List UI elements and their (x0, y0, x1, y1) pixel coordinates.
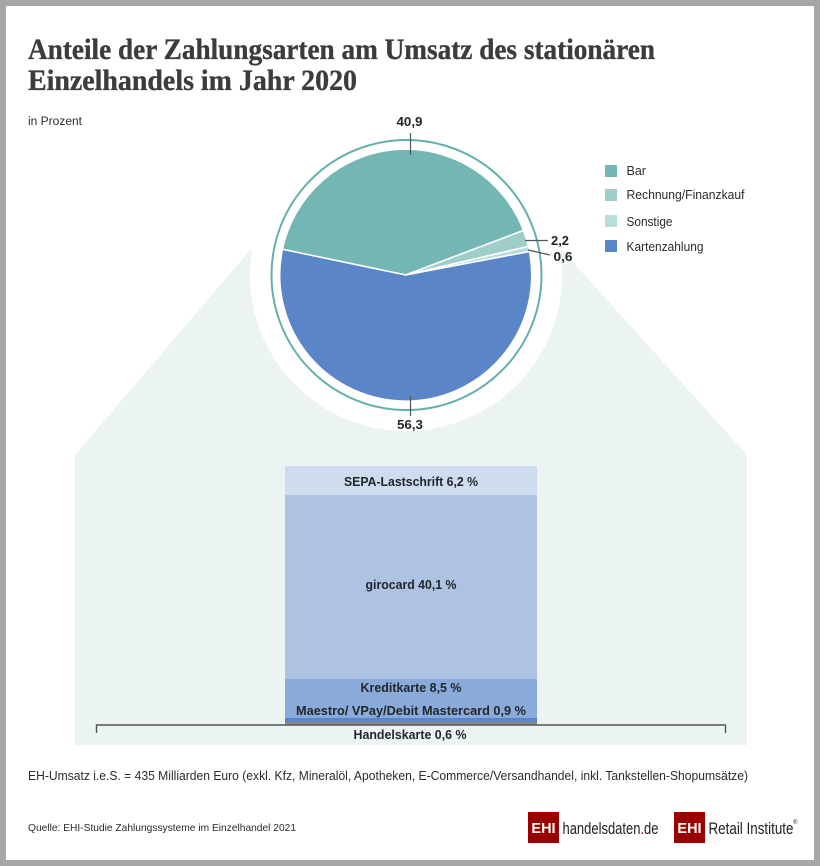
slice: Bar 40,9 (282, 149, 524, 275)
value label: 0,6 (528, 250, 573, 264)
segment: SEPA-Lastschrift (285, 466, 537, 495)
logo: EHI Retail Institute: Retail Institute (708, 819, 794, 838)
segment: Maestro/ VPay/Debit Mastercard: Maestro/ VPay/Debit Mastercard 0,9 % (296, 704, 526, 718)
legend item: Bar: Bar (626, 164, 646, 178)
logo: EHI Retail Institute: ® (793, 819, 798, 826)
legend item: Sonstige (605, 215, 673, 229)
white halo (250, 119, 562, 431)
unit note: in Prozent (28, 116, 83, 128)
segment: Handelskarte (285, 722, 537, 725)
segment: Maestro/ VPay/Debit Mastercard (285, 704, 537, 722)
source: Quelle: EHI-Studie Zahlungssysteme im Einzelhandel 2021 (28, 822, 296, 834)
value label: 40,9: 40,9 (396, 115, 423, 129)
logo: EHI Retail Institute (674, 812, 798, 843)
value label: 56,3: 56,3 (397, 418, 423, 432)
value label: 40,9 (396, 115, 423, 155)
logo: EHI handelsdaten.de (528, 812, 658, 843)
segment: Kreditkarte: Kreditkarte 8,5 % (360, 681, 462, 695)
title: Einzelhandels im Jahr 2020 (28, 64, 357, 97)
pie chart (250, 115, 573, 432)
title: Anteile der Zahlungsarten am Umsatz des stationären (28, 33, 655, 66)
outer ring (272, 140, 542, 410)
value label: 2,2 (525, 234, 569, 248)
value label: 56,3 (397, 396, 423, 432)
legend item: Bar (605, 164, 646, 178)
legend item: Rechnung/Finanzkauf: Rechnung/Finanzkauf (626, 188, 745, 202)
segment: SEPA-Lastschrift: SEPA-Lastschrift 6,2 % (344, 475, 478, 489)
slice: Sonstige 0,6 (406, 246, 530, 275)
logo: EHI Retail Institute: EHI (677, 821, 702, 837)
logo: EHI handelsdaten.de: handelsdaten.de (562, 819, 658, 838)
segment: girocard: girocard 40,1 % (366, 578, 456, 592)
legend item: Kartenzahlung: Kartenzahlung (626, 240, 704, 254)
legend item: Sonstige: Sonstige (626, 215, 673, 229)
bracket: Handelskarte (96, 725, 726, 733)
label: Handelskarte: Handelskarte 0,6 % (354, 728, 466, 742)
slice: Kartenzahlung 56,3 (280, 249, 532, 401)
legend (605, 164, 745, 254)
value label: 0,6: 0,6 (554, 250, 573, 264)
segment: girocard (285, 495, 537, 679)
stacked bar: card payments (285, 466, 537, 725)
segment: Kreditkarte (285, 679, 537, 718)
zoom background panel (75, 250, 747, 745)
value label: 2,2: 2,2 (551, 234, 569, 248)
footnote: EH-Umsatz i.e.S. = 435 Milliarden Euro (exkl. Kfz, Mineralöl, Apotheken, E-Commerce/Versandhandel, inkl. Tankstellen-Shopumsätze) (28, 769, 748, 783)
slice: Rechnung/Finanzkauf 2,2 (406, 230, 528, 275)
logo: EHI handelsdaten.de: EHI (531, 821, 556, 837)
title (28, 33, 655, 97)
